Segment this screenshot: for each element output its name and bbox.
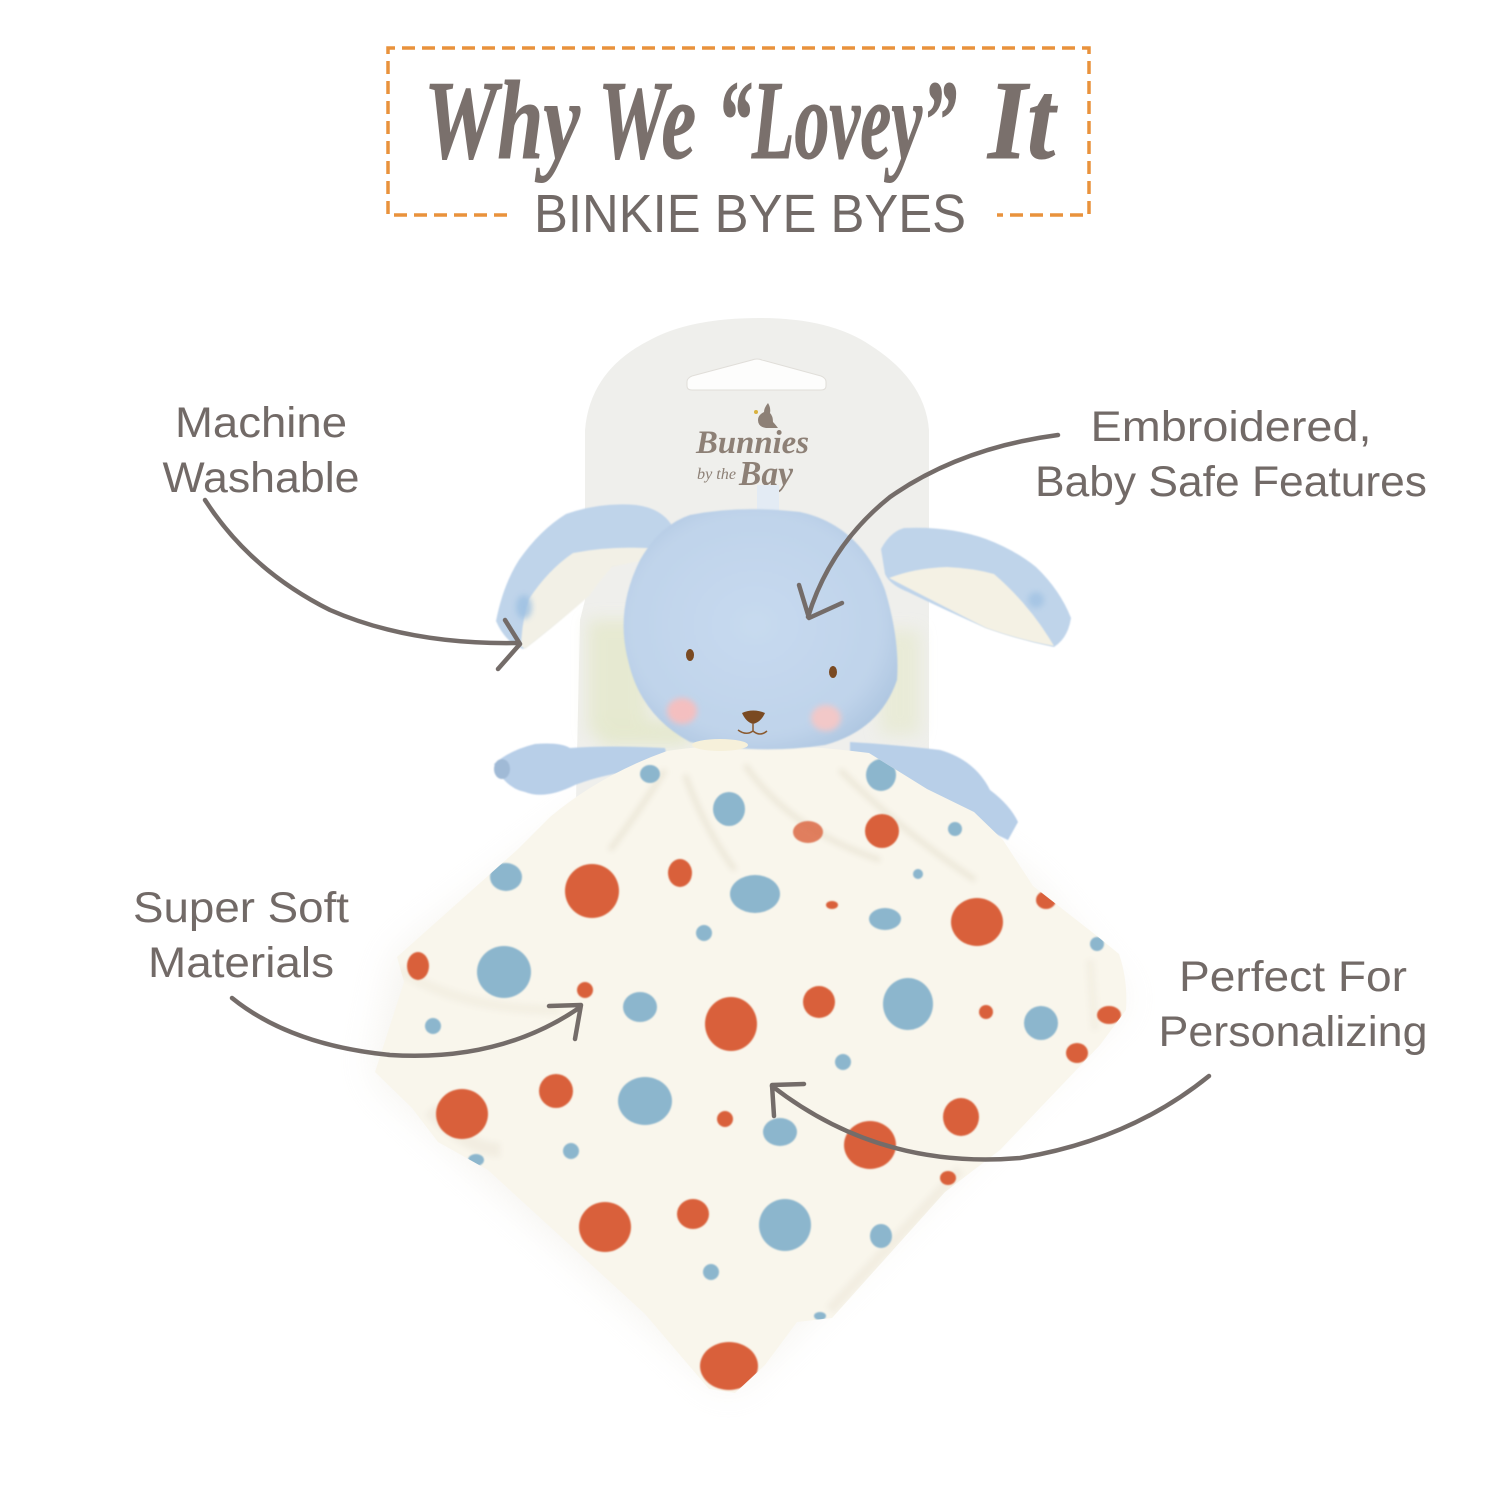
title: It [986, 59, 1058, 183]
card green watercolor band [588, 620, 920, 746]
card ribbon loop [757, 485, 779, 517]
blanket folds and shading [430, 766, 975, 1309]
callout: machine washable [162, 399, 520, 669]
arrow [772, 1076, 1209, 1160]
label: Perfect For [1179, 953, 1407, 1001]
dashed title frame [388, 48, 1089, 215]
arrow [232, 998, 581, 1056]
card logo [695, 403, 809, 493]
nose [742, 710, 765, 724]
title [424, 59, 1058, 183]
callout: perfect for personalizing [772, 953, 1428, 1160]
red dots [407, 814, 1121, 1390]
callout: embroidered features: Baby Safe Features [1035, 458, 1427, 506]
label: Super Soft [133, 884, 349, 932]
cheeks [667, 698, 697, 724]
bunny head [624, 509, 898, 751]
eyes [686, 649, 694, 661]
callout: super soft materials: Materials [148, 939, 334, 987]
title: Why [424, 59, 581, 183]
callout: machine washable: Washable [162, 454, 360, 502]
card logo: by the [697, 466, 736, 483]
subtitle: BINKIE BYE BYES [534, 184, 966, 244]
label: Embroidered, [1090, 403, 1372, 451]
left arm [494, 744, 670, 795]
arrow [799, 435, 1058, 618]
callout: perfect for personalizing: Personalizing [1158, 1008, 1428, 1056]
title: We [598, 59, 696, 183]
blanket [360, 735, 1140, 1405]
right ear [881, 528, 1071, 647]
card hang hole [687, 359, 826, 390]
title: “Lovey” [717, 59, 957, 183]
callout: embroidered features [799, 403, 1427, 618]
hang card [576, 318, 929, 800]
arrow [205, 500, 520, 669]
left ear [496, 504, 672, 649]
ribbon bow [692, 739, 748, 751]
card logo: Bunnies [695, 425, 809, 461]
right arm [850, 742, 1018, 840]
callout: super soft materials [133, 884, 581, 1056]
title block [388, 48, 1089, 244]
product photo: bunny lovey [360, 318, 1140, 1405]
label: Machine [175, 399, 347, 447]
card logo: Bay [738, 454, 793, 493]
soft shadow [375, 744, 1126, 1391]
blue dots [425, 759, 1104, 1320]
